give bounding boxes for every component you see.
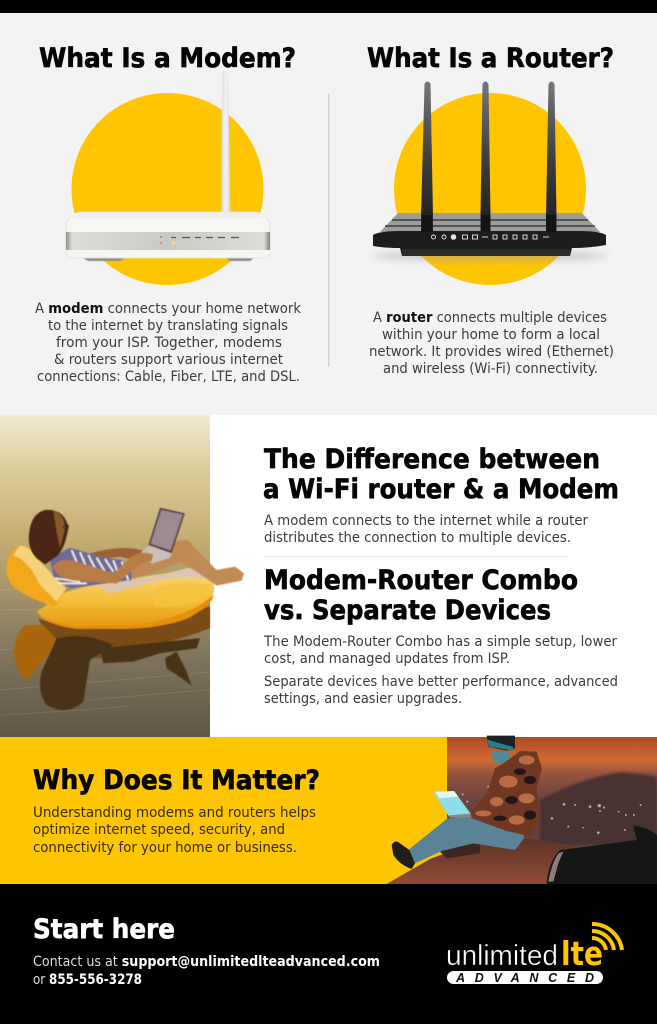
advanced pill: ADVANCED [455,971,594,985]
text block: modem description: connections: Cable, Fiber, LTE, and DSL. [37,369,300,385]
text block: separate devices description: Separate devices have better performance, advanced [264,674,618,690]
text block: why it matters: optimize internet speed, security, and [33,822,285,838]
heading: what is a modem: What Is a Modem? [39,43,296,74]
text block: why it matters: Understanding modems and routers helps [33,805,316,821]
heading: combo vs separate: Modem-Router Combo [264,565,578,596]
heading: why does it matter: Why Does It Matter? [33,765,320,796]
photo: woman with laptop on pool float [0,415,244,737]
backpack [547,826,657,884]
panel: why does it matter [0,736,657,884]
rock [387,838,583,884]
heading: what is a router: What Is a Router? [367,43,614,74]
text block: why it matters [33,805,316,856]
text block: modem description: A modem connects your home network [35,301,302,317]
panel divider [328,94,330,367]
heading: combo vs separate: vs. Separate Devices [264,595,551,626]
heading: combo vs separate [264,565,578,626]
router status lights [432,235,549,239]
text block: modem description: from your ISP. Together, modems [56,335,282,351]
text block: separate devices description: settings, and easier upgrades. [264,691,462,707]
text block: difference description: distributes the connection to multiple devices. [264,530,571,546]
text block: contact details [33,954,380,988]
text block: combo description: The Modem-Router Combo has a simple setup, lower [263,634,617,650]
yellow circle behind modem [72,93,264,285]
text block: modem description [35,301,302,385]
pool float [6,545,214,629]
text block: combo description [263,634,617,667]
top black bar [0,0,657,13]
text block: difference description [264,513,588,546]
logo: unlimited lte advanced: lte [561,934,603,973]
icon: black router [372,82,608,260]
text block: modem description: & routers support various internet [54,352,283,368]
photo: man with laptop on mountain [387,736,657,884]
panel: modem and router explainer [0,13,657,415]
text block: router description [369,310,614,377]
yellow circle behind router [394,93,586,285]
text block: separate devices description [264,674,618,707]
router antennas [421,82,556,232]
icon: signal arcs [592,924,622,950]
woman and laptop [29,508,244,588]
text block: modem description: to the internet by translating signals [48,318,288,334]
pool float reflection [13,607,210,710]
text block: contact details: Contact us at support@unlimitedlteadvanced.com [33,954,380,970]
heading: difference between router and modem: a Wi-Fi router & a Modem [263,474,619,505]
icon: white modem [66,70,270,261]
text block: router description: network. It provides wired (Ethernet) [369,344,614,360]
logo: unlimited lte advanced [446,924,622,985]
heading: difference between router and modem: The Difference between [264,444,600,475]
mountains and city lights [462,772,657,845]
text block: router description: A router connects multiple devices [373,310,607,326]
text block: combo description: cost, and managed updates from ISP. [264,651,510,667]
text block: router description: and wireless (Wi-Fi) connectivity. [383,361,598,377]
text block: router description: within your home to form a local [382,327,600,343]
heading: start here: Start here [33,914,175,945]
text block: difference description: A modem connects to the internet while a router [264,513,588,529]
man [392,736,542,869]
panel: differences [0,415,657,737]
text block: contact details: or 855-556-3278 [33,972,142,988]
text block: why it matters: connectivity for your home or business. [33,840,297,856]
panel: footer contact [0,884,657,1024]
logo: unlimited lte advanced: unlimited [446,940,558,972]
heading: difference between router and modem [263,444,619,505]
